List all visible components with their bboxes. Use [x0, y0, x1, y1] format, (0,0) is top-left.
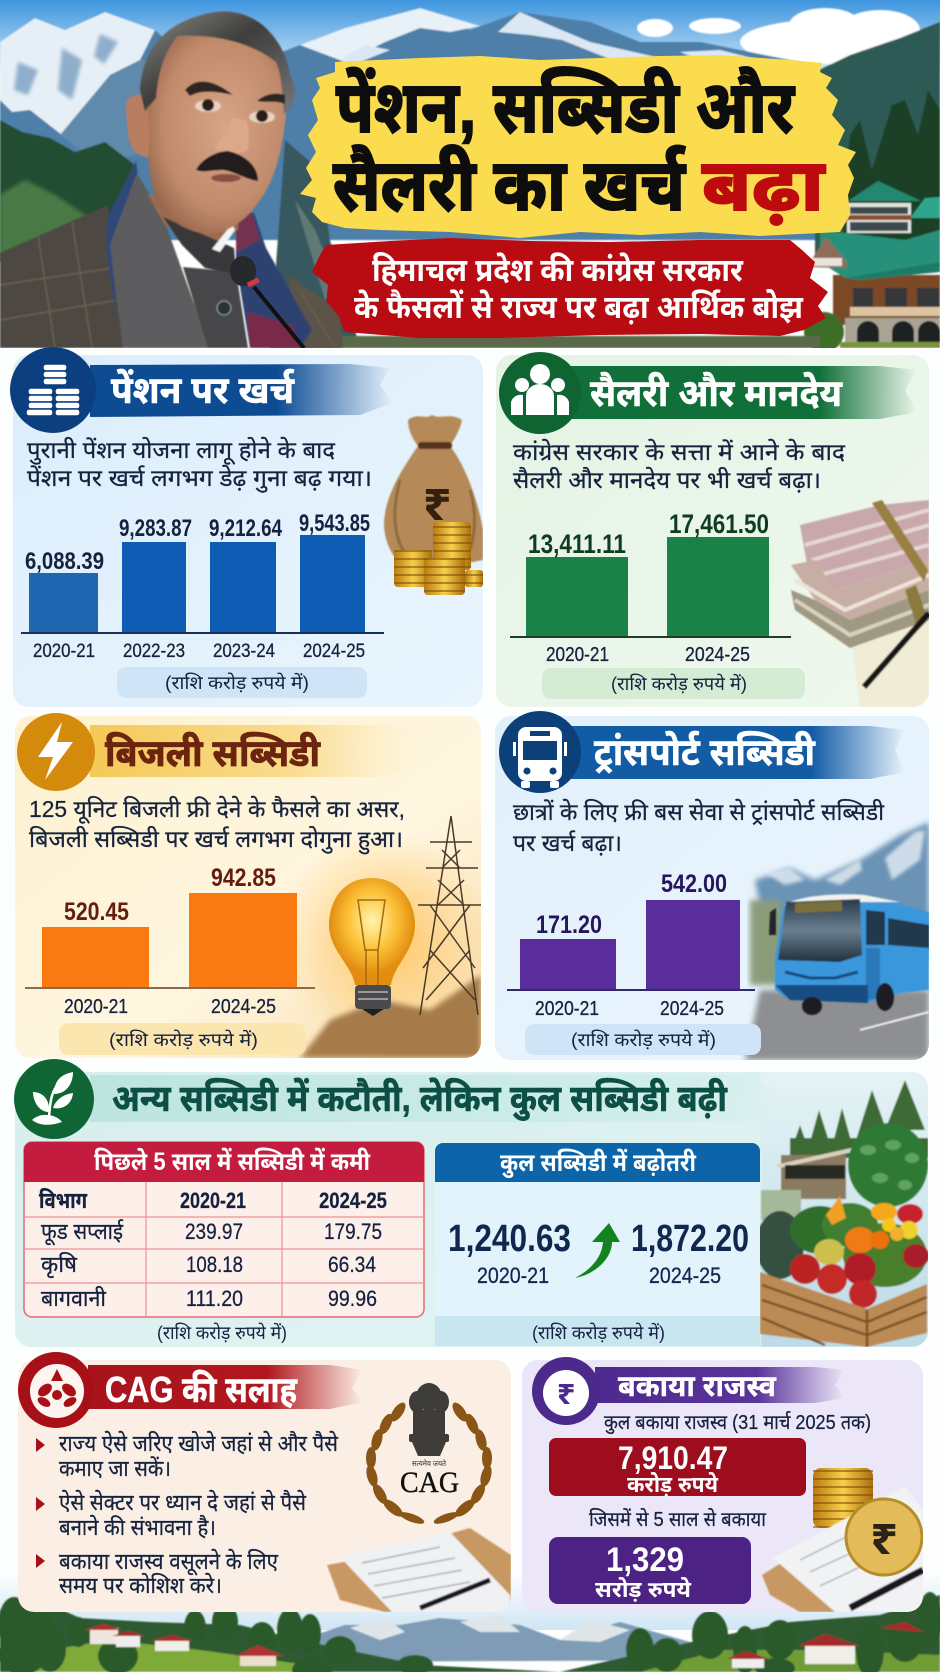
total subsidy card: 1,872.20 — [631, 1218, 749, 1260]
CAG emblem with wreath: CAG — [400, 1466, 459, 1499]
description: pension — [27, 437, 372, 493]
panel: other subsidies — [14, 1059, 929, 1347]
bar chart: pension: 2024-25 — [303, 641, 365, 662]
bar chart: pension: 2022-23 — [123, 641, 185, 662]
CAG emblem with wreath: सत्यमेव जयते — [412, 1460, 447, 1468]
headline line 1: पेंशन, सब्सिडी और — [336, 67, 795, 148]
icon: coin stacks — [26, 364, 80, 416]
unit note: cuts: (राशि करोड़ रुपये में) — [157, 1322, 287, 1343]
panel: pension — [10, 347, 483, 707]
red brush strip — [312, 238, 828, 338]
description: electricity: बिजली सब्सिडी पर खर्च लगभग दोगुना हुआ। — [29, 826, 403, 855]
total subsidy card: कुल सब्सिडी में बढ़ोतरी — [500, 1148, 697, 1178]
building — [340, 181, 940, 352]
bar chart: pension: 9,212.64 — [209, 515, 283, 542]
unit note: salary — [542, 668, 805, 699]
description: transport — [513, 799, 885, 856]
footer landscape — [0, 1570, 940, 1672]
section banner: other subsidies — [14, 1059, 790, 1139]
advice list: समय पर कोशिश करे। — [59, 1572, 222, 1598]
stat box: total dues — [549, 1438, 806, 1498]
icon: rupee: ₹ — [557, 1375, 575, 1411]
heading: other subsidies: अन्य सब्सिडी में कटौती, लेकिन कुल सब्सिडी बढ़ी — [112, 1077, 728, 1121]
subtitle line 1: हिमाचल प्रदेश की कांग्रेस सरकार — [372, 252, 744, 288]
icon: sprout — [32, 1072, 73, 1125]
bar chart: salary: 17,461.50 — [669, 509, 769, 539]
section banner: CAG — [18, 1352, 363, 1428]
section banner: revenue — [532, 1357, 845, 1425]
stat box: five-year dues: 1,329 — [606, 1541, 684, 1579]
total subsidy card — [435, 1143, 760, 1346]
stat box: total dues: करोड़ रुपये — [627, 1472, 719, 1498]
description: pension: पेंशन पर खर्च लगभग डेढ़ गुना बढ़ गया। — [27, 465, 372, 493]
bar chart: electricity: 942.85 — [211, 864, 276, 892]
bar chart: salary — [510, 509, 791, 666]
table: subsidy cuts: कृषि — [41, 1252, 78, 1279]
unit note: salary: (राशि करोड़ रुपये में) — [611, 673, 747, 694]
panel: outstanding revenue — [522, 1357, 923, 1612]
icon: people — [511, 364, 569, 415]
bar chart: electricity: 2024-25 — [211, 996, 276, 1018]
description: salary — [513, 439, 846, 493]
table: subsidy cuts: 108.18 — [186, 1252, 243, 1277]
heading: salary: सैलरी और मानदेय — [590, 371, 843, 415]
bar chart: transport: 171.20 — [536, 911, 602, 939]
bar chart: electricity: 2020-21 — [64, 996, 128, 1018]
description: transport: छात्रों के लिए फ्री बस सेवा से ट्रांसपोर्ट सब्सिडी — [513, 799, 885, 825]
bar chart: transport: 542.00 — [661, 870, 727, 898]
forest right — [815, 22, 940, 260]
bar chart: transport — [507, 870, 755, 1020]
table: subsidy cuts: पिछले 5 साल में सब्सिडी में कमी — [94, 1147, 371, 1176]
section banner: pension — [10, 347, 392, 433]
unit note: pension — [117, 667, 367, 698]
table: subsidy cuts: 66.34 — [328, 1252, 376, 1277]
heading: revenue: बकाया राजस्व — [618, 1370, 777, 1403]
panel: electricity subsidy — [15, 713, 495, 1058]
headline red word: बढ़ा — [702, 146, 826, 226]
section banner: salary — [499, 352, 917, 434]
table: subsidy cuts: 239.97 — [185, 1219, 243, 1244]
subtitle line 2: के फैसलों से राज्य पर बढ़ा आर्थिक बोझ — [354, 289, 804, 325]
hero banner — [0, 0, 940, 352]
table: subsidy cuts: 2024-25 — [319, 1188, 387, 1213]
illustration: money bag and coins — [384, 415, 483, 595]
illustration: rupee bundles and pen — [791, 500, 929, 707]
icon: bus — [513, 727, 567, 788]
table: subsidy cuts: 179.75 — [324, 1219, 382, 1244]
total subsidy card: 1,240.63 — [448, 1218, 571, 1260]
description: transport: पर खर्च बढ़ा। — [513, 830, 622, 856]
table: subsidy cuts: विभाग — [39, 1188, 87, 1213]
heading: pension: पेंशन पर खर्च — [111, 368, 295, 412]
bar chart: salary: 2020-21 — [546, 644, 609, 666]
unit note: total: (राशि करोड़ रुपये में) — [532, 1322, 665, 1343]
table: subsidy cuts — [24, 1142, 424, 1317]
total subsidy card: 2020-21 — [477, 1263, 549, 1288]
illustration: coins, papers and rupee coin: ₹ — [870, 1512, 898, 1565]
panel: salary — [496, 352, 929, 707]
description: electricity: 125 यूनिट बिजली फ्री देने के फैसले का असर, — [29, 796, 405, 824]
illustration: money bag and coins: ₹ — [423, 475, 451, 531]
bar chart: electricity — [25, 864, 315, 1018]
table: subsidy cuts: 2020-21 — [180, 1188, 246, 1213]
advice list: राज्य ऐसे जरिए खोजे जहां से और पैसे — [59, 1430, 339, 1456]
bar chart: pension: 9,543.85 — [299, 510, 370, 537]
unit note: transport — [525, 1024, 761, 1055]
icon: lightning — [38, 722, 73, 780]
description: salary: कांग्रेस सरकार के सत्ता में आने के बाद — [513, 439, 846, 465]
arrow: increase — [575, 1223, 620, 1278]
minister portrait — [0, 11, 343, 348]
heading: electricity: बिजली सब्सिडी — [105, 731, 321, 775]
description: electricity — [29, 796, 405, 855]
unit note: transport: (राशि करोड़ रुपये में) — [571, 1029, 716, 1050]
clouds — [637, 8, 920, 64]
section banner: electricity — [17, 713, 417, 791]
forest left — [0, 120, 135, 262]
table: subsidy cuts: 99.96 — [328, 1286, 377, 1311]
bar chart: salary: 2024-25 — [685, 644, 750, 666]
bar chart: pension: 2023-24 — [213, 641, 275, 662]
unit note: pension: (राशि करोड़ रुपये में) — [165, 672, 309, 693]
table: subsidy cuts: फूड सप्लाई — [41, 1219, 124, 1246]
microphone — [230, 256, 304, 348]
total subsidy card: 2024-25 — [649, 1263, 721, 1288]
bar chart: pension: 2020-21 — [33, 641, 95, 662]
face — [147, 35, 286, 234]
bar chart: pension: 9,283.87 — [119, 515, 192, 542]
illustration: bus on mountain road — [745, 822, 929, 1060]
icon: emblem — [36, 1369, 78, 1409]
bar chart: pension: 6,088.39 — [25, 548, 104, 575]
description: salary: सैलरी और मानदेय पर भी खर्च बढ़ा। — [513, 467, 821, 493]
yellow brush strip — [300, 55, 856, 238]
subheading: total dues: कुल बकाया राजस्व (31 मार्च 2025 तक) — [604, 1411, 871, 1435]
CAG emblem with wreath — [364, 1383, 494, 1526]
table: subsidy cuts: बागवानी — [41, 1286, 106, 1311]
subheading: five-year dues: जिसमें से 5 साल से बकाया — [589, 1507, 767, 1531]
panel: transport subsidy — [495, 711, 929, 1060]
mountains — [0, 8, 815, 240]
illustration: bulb and power tower — [294, 816, 481, 1058]
advice list: बनाने की संभावना है। — [59, 1514, 216, 1540]
panel: CAG advice — [18, 1352, 511, 1612]
stat box: total dues: 7,910.47 — [618, 1440, 728, 1476]
headline line 2: सैलरी का खर्च — [333, 145, 686, 226]
unit note: electricity: (राशि करोड़ रुपये में) — [109, 1029, 258, 1050]
illustration: document and pen — [327, 1528, 511, 1612]
bar chart: transport: 2020-21 — [535, 998, 599, 1020]
advice list: कमाए जा सकें। — [59, 1456, 171, 1481]
advice list — [36, 1430, 339, 1598]
advice list: बकाया राजस्व वसूलने के लिए — [59, 1548, 279, 1576]
illustration: coins, papers and rupee coin — [762, 1468, 923, 1612]
stat box: five-year dues — [549, 1537, 751, 1604]
bar chart: pension — [21, 510, 384, 662]
bar chart: electricity: 520.45 — [64, 898, 129, 926]
heading: transport: ट्रांसपोर्ट सब्सिडी — [594, 730, 816, 774]
table: subsidy cuts: 111.20 — [186, 1286, 243, 1311]
bar chart: transport: 2024-25 — [660, 998, 724, 1020]
advice list: ऐसे सेक्टर पर ध्यान दे जहां से पैसे — [59, 1489, 307, 1515]
section banner: transport — [499, 711, 905, 793]
bar chart: salary: 13,411.11 — [528, 529, 626, 559]
heading: CAG: CAG की सलाह — [105, 1369, 298, 1410]
unit note: electricity — [59, 1023, 306, 1055]
stat box: five-year dues: सरोड़ रुपये — [595, 1577, 692, 1603]
description: pension: पुरानी पेंशन योजना लागू होने के बाद — [27, 437, 336, 465]
illustration: farm produce crate — [756, 1072, 929, 1347]
